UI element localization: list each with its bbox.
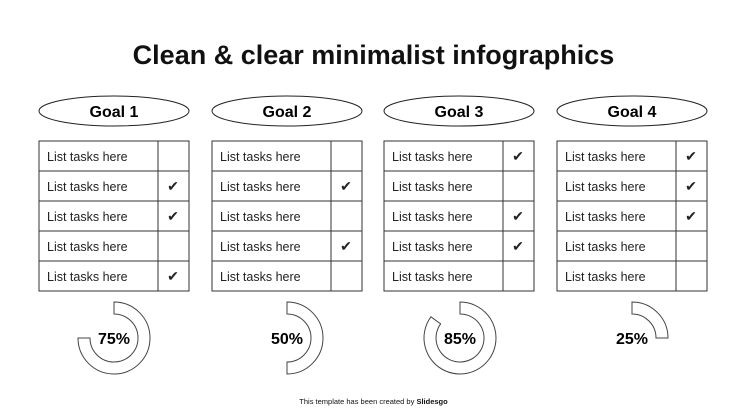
- goal 2 column: List tasks here: [220, 180, 301, 194]
- goal 1 column: List tasks here: [47, 150, 128, 164]
- goal 2 table: [212, 141, 362, 291]
- goal 1 table: [39, 141, 189, 291]
- goal 4 column: List tasks here: [565, 180, 646, 194]
- goal 1 column: ✔: [167, 268, 179, 284]
- goal 4 column: [557, 96, 707, 348]
- donut 75%: [78, 302, 150, 374]
- goal 3 label: Goal 3: [435, 104, 484, 121]
- goal 1 column: List tasks here: [47, 270, 128, 284]
- donut 75%: 75%: [98, 331, 130, 348]
- goal 2 column: [212, 96, 362, 374]
- goal 3 column: List tasks here: [392, 240, 473, 254]
- donut 50%: [271, 302, 323, 374]
- goal 3 column: ✔: [512, 148, 524, 164]
- goal 2 column: List tasks here: [220, 150, 301, 164]
- goal 2 label: Goal 2: [263, 104, 312, 121]
- goal 1 column: List tasks here: [47, 210, 128, 224]
- goal 2 column: List tasks here: [220, 210, 301, 224]
- goal 4 column: List tasks here: [565, 270, 646, 284]
- goal 1 label: Goal 1: [90, 104, 139, 121]
- goal 3 column: [384, 96, 534, 374]
- goal 4 column: List tasks here: [565, 210, 646, 224]
- goal 2 column: ✔: [340, 238, 352, 254]
- donut 25%: [616, 302, 668, 348]
- goal 4 column: ✔: [685, 178, 697, 194]
- goal 3 column: ✔: [512, 208, 524, 224]
- donut 85%: 85%: [444, 331, 476, 348]
- goal 4 column: ✔: [685, 148, 697, 164]
- goal 2 column: List tasks here: [220, 240, 301, 254]
- goal 4 column: List tasks here: [565, 240, 646, 254]
- goal 3 column: List tasks here: [392, 210, 473, 224]
- goal 1 column: [39, 96, 189, 374]
- donut 85%: [424, 302, 496, 374]
- goal 2 column: List tasks here: [220, 270, 301, 284]
- goal 2 label: [212, 96, 362, 126]
- goal 1 label: [39, 96, 189, 126]
- goal 4 column: ✔: [685, 208, 697, 224]
- footer credit: This template has been created by Slidesgo: [299, 397, 448, 406]
- goal 3 table: [384, 141, 534, 291]
- goal 3 label: [384, 96, 534, 126]
- title: Clean & clear minimalist infographics: [133, 40, 614, 70]
- donut 25%: 25%: [616, 331, 648, 348]
- goal 4 table: [557, 141, 707, 291]
- goal 4 column: List tasks here: [565, 150, 646, 164]
- donut 50%: 50%: [271, 331, 303, 348]
- goal 3 column: ✔: [512, 238, 524, 254]
- goal 1 column: List tasks here: [47, 240, 128, 254]
- goal 4 label: [557, 96, 707, 126]
- goal 2 column: ✔: [340, 178, 352, 194]
- goal 3 column: List tasks here: [392, 150, 473, 164]
- goal 1 column: List tasks here: [47, 180, 128, 194]
- goal 1 column: ✔: [167, 178, 179, 194]
- goal 1 column: ✔: [167, 208, 179, 224]
- goal 3 column: List tasks here: [392, 180, 473, 194]
- goal 3 column: List tasks here: [392, 270, 473, 284]
- goal 4 label: Goal 4: [608, 104, 657, 121]
